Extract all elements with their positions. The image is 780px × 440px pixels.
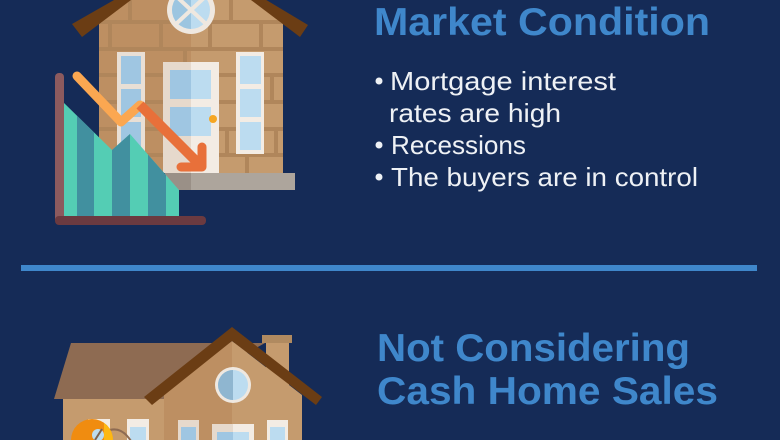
chart axes xyxy=(55,73,206,225)
heading: market condition: Market Condition xyxy=(374,1,710,44)
icon: suburban house with key tag xyxy=(54,327,322,440)
falling arrow xyxy=(77,76,202,167)
brick house wall xyxy=(99,0,283,173)
left window xyxy=(117,52,145,152)
door xyxy=(163,62,219,173)
gable wall xyxy=(164,341,302,440)
right window xyxy=(236,52,264,154)
bullet list xyxy=(376,66,698,192)
lower windows xyxy=(88,419,288,440)
doorstep xyxy=(165,173,295,190)
bullet: mortgage rates: Mortgage interest xyxy=(390,66,617,96)
heading: not considering cash home sales: Cash Home Sales xyxy=(377,370,718,413)
chimney xyxy=(262,335,292,392)
area chart xyxy=(55,73,206,225)
round attic window xyxy=(167,0,215,34)
heading: not considering cash home sales: Not Considering xyxy=(377,327,690,370)
round window xyxy=(215,367,251,403)
bullet: recessions: Recessions xyxy=(391,130,526,160)
bullet: mortgage rates xyxy=(376,66,617,128)
bullet: buyers in control: The buyers are in control xyxy=(391,162,698,192)
roof xyxy=(72,0,308,37)
left wall xyxy=(63,399,165,440)
gable roof xyxy=(144,327,322,405)
icon: brick house with falling chart xyxy=(55,0,308,225)
heading: not considering cash home sales xyxy=(377,327,718,413)
main roof xyxy=(54,343,265,399)
bullet: mortgage rates: rates are high xyxy=(389,98,561,128)
section divider xyxy=(21,265,757,271)
key tag xyxy=(71,419,131,440)
